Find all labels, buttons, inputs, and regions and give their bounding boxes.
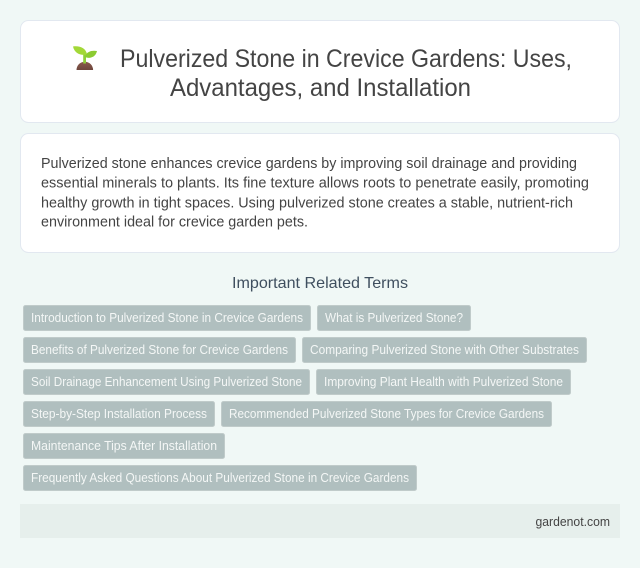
tag: Comparing Pulverized Stone with Other Substrates bbox=[310, 343, 579, 357]
panel: description bbox=[20, 134, 620, 252]
title panel bbox=[20, 20, 620, 122]
footer bbox=[20, 504, 620, 538]
tag bbox=[24, 402, 214, 426]
tag: Introduction to Pulverized Stone in Crevice Gardens bbox=[31, 311, 303, 325]
related terms tags bbox=[24, 306, 586, 490]
icon: seedling bbox=[73, 46, 97, 70]
tag bbox=[316, 370, 570, 394]
description text: healthy growth in tight spaces. Using pulverized stone creates a stable, nutrient-rich bbox=[41, 196, 573, 212]
tag bbox=[24, 306, 310, 330]
description text bbox=[41, 156, 589, 230]
title text bbox=[120, 45, 572, 102]
tag: What is Pulverized Stone? bbox=[325, 311, 463, 325]
tag bbox=[24, 338, 296, 362]
description text: environment ideal for crevice garden pets. bbox=[41, 214, 308, 230]
tag: Maintenance Tips After Installation bbox=[31, 439, 217, 453]
tag bbox=[222, 402, 552, 426]
tag bbox=[24, 370, 310, 394]
description text: Pulverized stone enhances crevice gardens by improving soil drainage and providing bbox=[41, 156, 577, 172]
tag bbox=[24, 434, 224, 458]
tag: Benefits of Pulverized Stone for Crevice Gardens bbox=[31, 343, 288, 357]
title text: Pulverized Stone in Crevice Gardens: Uses, bbox=[120, 45, 572, 73]
tag: Step-by-Step Installation Process bbox=[31, 407, 207, 421]
tag: Frequently Asked Questions About Pulverized Stone in Crevice Gardens bbox=[31, 471, 409, 485]
tag bbox=[302, 338, 586, 362]
description text: essential minerals to plants. Its fine texture allows roots to penetrate easily, promoting bbox=[41, 176, 589, 192]
title text: Advantages, and Installation bbox=[170, 74, 471, 102]
tag bbox=[318, 306, 470, 330]
heading: related terms: Important Related Terms bbox=[232, 275, 408, 292]
tag bbox=[24, 466, 416, 490]
footer source text: gardenot.com bbox=[536, 514, 610, 529]
tag: Improving Plant Health with Pulverized Stone bbox=[324, 375, 563, 389]
tag: Soil Drainage Enhancement Using Pulverized Stone bbox=[31, 375, 302, 389]
tag: Recommended Pulverized Stone Types for Crevice Gardens bbox=[229, 407, 544, 421]
